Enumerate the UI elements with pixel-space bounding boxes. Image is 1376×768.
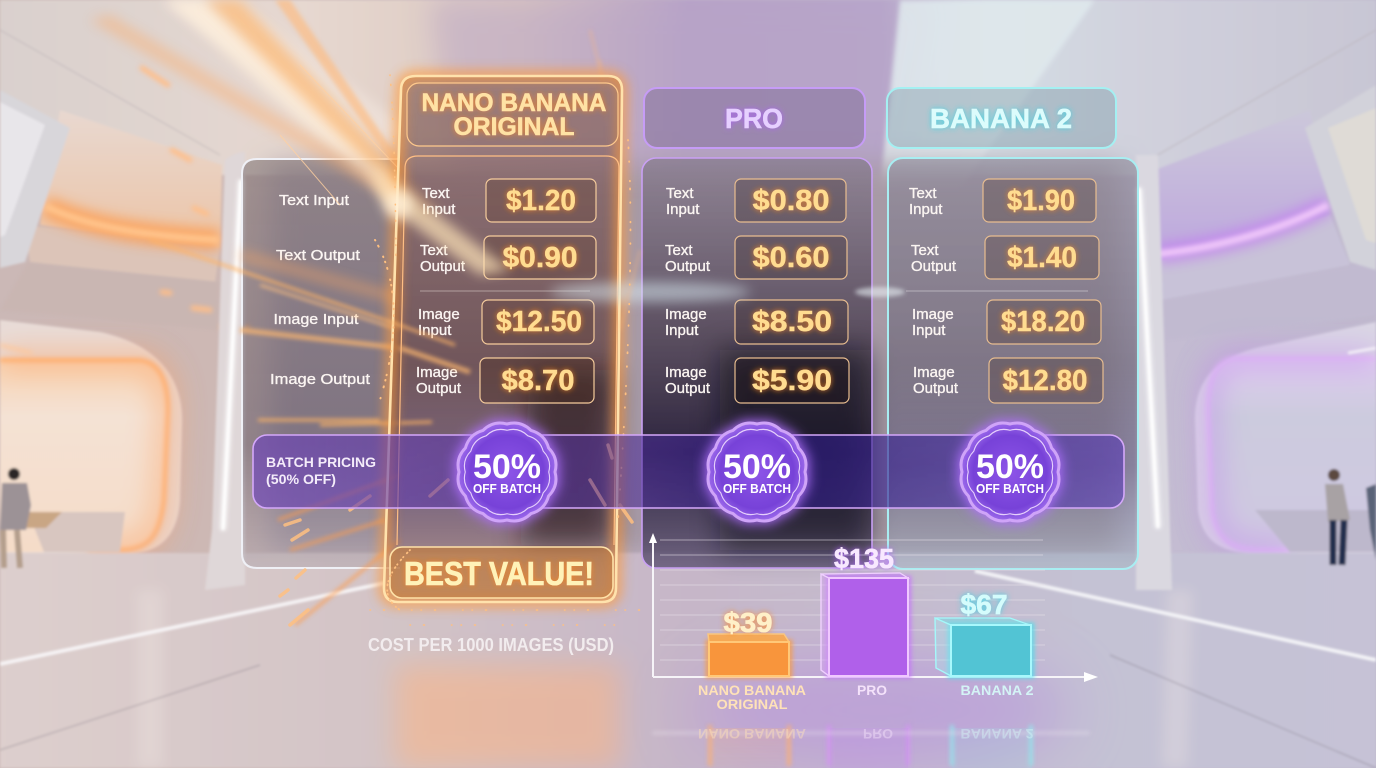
bar chart: cost per 1000 images	[649, 533, 1098, 741]
discount badge banana 2	[958, 420, 1062, 524]
x-axis labels: ORIGINAL	[716, 697, 788, 712]
orange light beams behind panels	[90, 0, 608, 625]
mirrored label reflections	[698, 726, 1034, 741]
orig row labels: Input	[422, 201, 456, 218]
banana 2 row labels: Image	[913, 364, 955, 381]
grid lines	[660, 540, 1045, 660]
x-axis labels: BANANA 2	[960, 683, 1034, 698]
bar: banana 2 $67	[935, 589, 1032, 676]
discount badge banana 2: OFF BATCH	[976, 482, 1044, 496]
orig row labels: Image	[418, 306, 460, 323]
orig price boxes: $1.20	[506, 185, 576, 217]
bar: banana 2 $67: $67	[960, 589, 1008, 620]
coves	[0, 68, 1376, 340]
sparks around the orange panel	[280, 75, 640, 625]
banana 2 price boxes: $1.90	[1007, 185, 1075, 217]
panel: Pro body	[642, 88, 872, 568]
row label: image input: Image Input	[274, 311, 359, 328]
discount badge pro: OFF BATCH	[723, 482, 791, 496]
pro row labels	[665, 185, 711, 397]
pro row labels: Text	[665, 242, 693, 259]
bar: pro $135: $135	[834, 543, 894, 574]
orig row labels: Output	[420, 258, 466, 275]
banana 2 price boxes: $18.20	[1001, 306, 1085, 338]
orig header: ORIGINAL	[454, 113, 574, 141]
row label: text output: Text Output	[276, 247, 361, 264]
pro price boxes: $0.80	[752, 185, 830, 217]
row label: text input: Text Input	[279, 192, 350, 209]
orig price boxes: $12.50	[496, 306, 582, 338]
pro price boxes: $8.50	[752, 306, 832, 338]
pro row labels: Output	[665, 258, 711, 275]
banana 2 price boxes: $1.40	[1007, 242, 1077, 274]
horizontal light glare across panels	[550, 282, 905, 302]
x-axis labels	[698, 683, 1034, 712]
columns with vertical lights	[205, 152, 1172, 590]
mirrored label reflections: BANANA 2	[960, 726, 1034, 741]
pro row labels: Text	[666, 185, 694, 202]
orig price boxes: $0.90	[502, 242, 578, 274]
batch label	[266, 454, 376, 487]
banana 2 row labels: Text	[909, 185, 937, 202]
banana 2 price boxes: $12.80	[1002, 365, 1088, 397]
discount badge original	[455, 420, 559, 524]
floor	[0, 553, 1376, 768]
orange beams over the panel edge	[370, 165, 640, 423]
orig header: NANO BANANA	[422, 89, 606, 117]
bar: original $39: $39	[724, 607, 772, 638]
banana 2 header	[887, 88, 1116, 148]
orig row labels: Input	[418, 322, 452, 339]
banana 2 header: BANANA 2	[930, 103, 1072, 134]
mirrored label reflections: NANO BANANA	[698, 726, 806, 741]
bar: pro $135	[821, 543, 909, 676]
pro header	[644, 88, 865, 148]
banana 2 row labels: Output	[911, 258, 957, 275]
discount badge original: 50%	[473, 448, 541, 486]
pro row labels: Output	[665, 380, 711, 397]
pro row labels: Input	[665, 322, 699, 339]
banana 2 row labels: Input	[909, 201, 943, 218]
axes	[649, 533, 1098, 682]
pro row labels: Input	[666, 201, 700, 218]
x-axis labels: NANO BANANA	[698, 683, 806, 698]
orig row labels	[416, 185, 466, 397]
pro price boxes: $5.90	[752, 365, 832, 397]
people in the background	[0, 468, 1376, 568]
pro price boxes	[735, 179, 849, 403]
best value badge: BEST VALUE!	[404, 555, 594, 592]
discount badge pro: 50%	[723, 448, 791, 486]
banana 2 row labels: Input	[912, 322, 946, 339]
floor guide lines	[0, 571, 1376, 768]
chart title: COST PER 1000 IMAGES (USD)	[368, 635, 614, 655]
floor reflections	[652, 725, 1090, 768]
batch label: (50% OFF)	[266, 471, 336, 487]
orig row labels: Image	[416, 364, 458, 381]
bar: original $39	[708, 607, 790, 676]
banana 2 row labels: Output	[913, 380, 959, 397]
x-axis labels: PRO	[857, 683, 887, 698]
left row-label panel	[242, 159, 400, 568]
orig price boxes	[480, 179, 596, 403]
orig row labels: Text	[422, 185, 450, 202]
band: batch pricing	[253, 420, 1124, 524]
orig inner body outline	[397, 156, 619, 545]
corner ceiling boxes	[0, 85, 1376, 270]
orig row labels: Output	[416, 380, 462, 397]
discount badge pro	[705, 420, 809, 524]
alcove right	[1195, 322, 1376, 553]
panel: Nano Banana Original	[384, 76, 622, 602]
panel: Banana 2 body	[887, 88, 1138, 569]
best value badge	[390, 547, 613, 598]
orig row labels: Text	[420, 242, 448, 259]
pro price boxes: $0.60	[752, 242, 830, 274]
alcove left	[0, 320, 182, 553]
orig header	[407, 83, 618, 146]
mirrored label reflections: PRO	[863, 726, 893, 741]
banana 2 row labels: Text	[911, 242, 939, 259]
banana 2 row labels	[909, 185, 959, 397]
pro row labels: Image	[665, 364, 707, 381]
orig price boxes: $8.70	[502, 365, 574, 397]
discount badge original: OFF BATCH	[473, 482, 541, 496]
row label: image output: Image Output	[270, 371, 371, 388]
discount badge banana 2: 50%	[976, 448, 1044, 486]
pro row labels: Image	[665, 306, 707, 323]
pro header: PRO	[725, 103, 783, 134]
banana 2 price boxes	[983, 179, 1103, 403]
banana 2 row labels: Image	[912, 306, 954, 323]
batch label: BATCH PRICING	[266, 454, 376, 470]
